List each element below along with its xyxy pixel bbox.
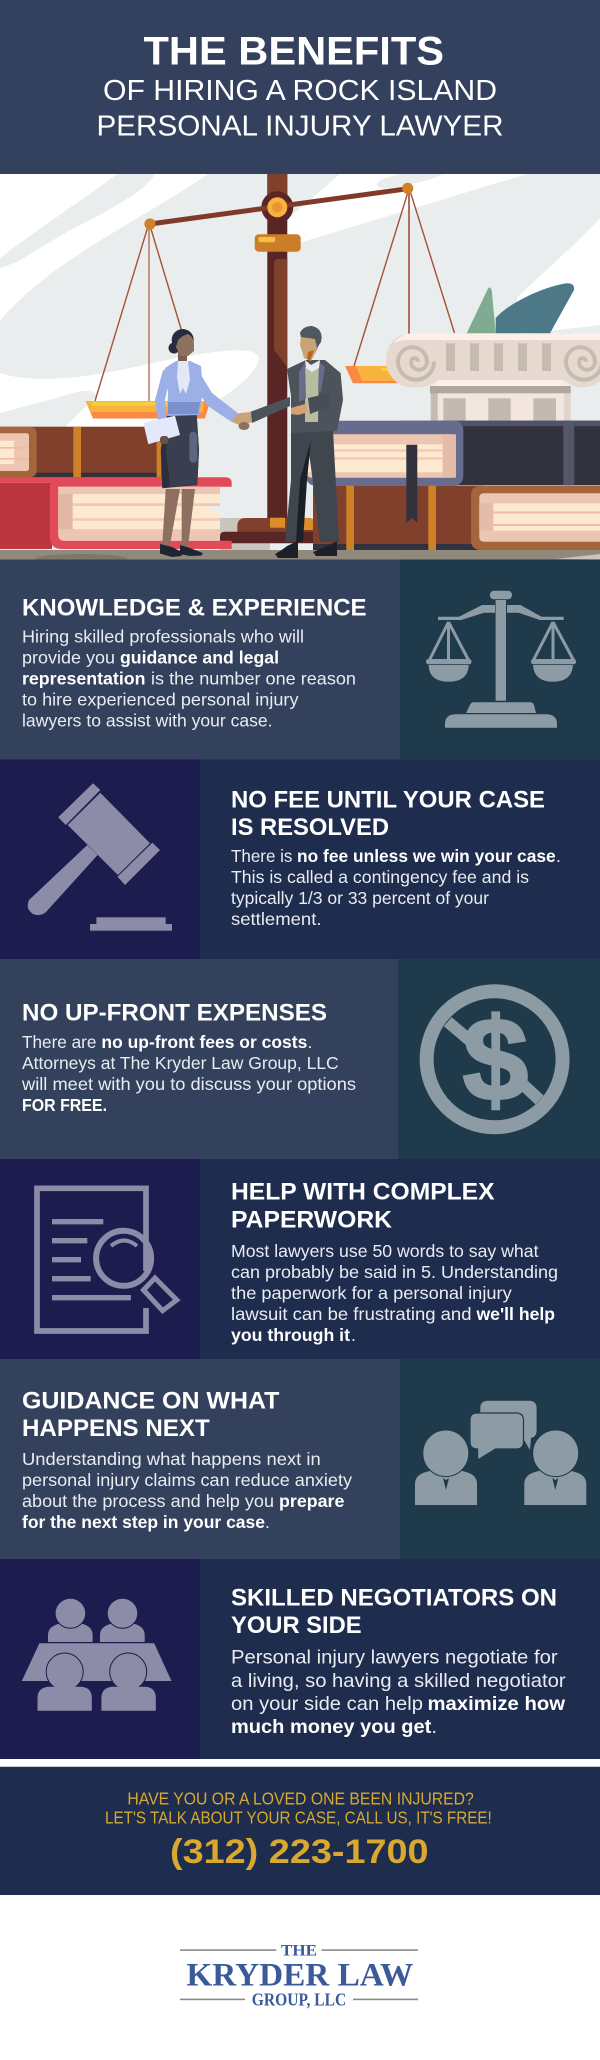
icon: scales of justice — [426, 591, 576, 728]
body text — [231, 1241, 558, 1345]
body text — [22, 1449, 352, 1532]
heading: PAPERWORK — [231, 1206, 392, 1233]
panel: help with complex paperwork — [0, 1159, 600, 1359]
icon: no dollar sign — [427, 991, 563, 1127]
body text: Attorneys at The Kryder Law Group, LLC — [22, 1053, 339, 1073]
body text — [231, 1647, 566, 1738]
body text: FOR FREE. — [22, 1095, 107, 1115]
body text: . — [308, 1032, 312, 1052]
body text: . — [556, 846, 561, 866]
call to action text: LET'S TALK ABOUT YOUR CASE, CALL US, IT'S FREE! — [105, 1807, 492, 1827]
body text: Personal injury lawyers negotiate for — [231, 1647, 558, 1669]
title: OF HIRING A ROCK ISLAND — [103, 75, 497, 107]
scale collar — [255, 234, 301, 252]
body text: lawsuit can be frustrating and — [231, 1304, 472, 1324]
icon: document with magnifier — [37, 1188, 177, 1331]
body text: personal injury claims can reduce anxiety — [22, 1470, 352, 1490]
right scale pan — [345, 366, 400, 383]
panel: skilled negotiators on your side — [0, 1559, 600, 1759]
body text: . — [265, 1512, 270, 1532]
body text: on your side can help — [231, 1693, 423, 1715]
body text: maximize how — [428, 1693, 566, 1715]
heading: NO UP-FRONT EXPENSES — [22, 999, 327, 1026]
body text: much money you get — [231, 1716, 432, 1738]
icon: two people talking — [415, 1401, 586, 1505]
heading: KNOWLEDGE & EXPERIENCE — [22, 595, 367, 622]
header banner — [0, 0, 600, 174]
heading: IS RESOLVED — [231, 814, 389, 841]
figure: man in grey suit — [232, 326, 343, 558]
heading — [22, 1388, 279, 1442]
body text: guidance and legal — [120, 647, 279, 667]
book: brown with orange straps — [313, 486, 483, 550]
body text: prepare — [279, 1491, 345, 1511]
heading: NO FEE UNTIL YOUR CASE — [231, 786, 545, 813]
call to action text — [105, 1788, 492, 1827]
body text: will meet with you to discuss your options — [21, 1074, 356, 1094]
pillar base — [220, 518, 322, 543]
body text: for the next step in your case — [22, 1512, 265, 1532]
title — [96, 30, 504, 143]
body text: is the number one reason — [151, 668, 356, 688]
panel: guidance on what happens next — [0, 1359, 600, 1559]
heading: SKILLED NEGOTIATORS ON — [231, 1585, 557, 1612]
body text: the paperwork for a personal injury — [231, 1283, 512, 1303]
body text: Hiring skilled professionals who will — [22, 626, 304, 646]
logo: The Kryder Law Group, LLC: THE — [281, 1943, 317, 1960]
title: THE BENEFITS — [144, 30, 444, 74]
classical column — [386, 334, 600, 421]
heading: YOUR SIDE — [231, 1612, 362, 1639]
scale beam — [144, 183, 413, 230]
scale pillar — [261, 174, 293, 522]
panel: no fee until your case is resolved — [0, 760, 600, 960]
body text: provide you — [22, 647, 115, 667]
body text: representation — [22, 668, 146, 688]
body text: about the process and help you — [22, 1491, 274, 1511]
icon: people negotiating at a table — [22, 1598, 171, 1711]
hero illustration: scales of justice, handshake, books — [0, 174, 600, 564]
heading: GUIDANCE ON WHAT — [22, 1388, 279, 1415]
heading — [231, 1585, 557, 1639]
heading — [231, 786, 545, 841]
panel: knowledge and experience — [0, 560, 600, 760]
icon: no dollar sign: $ — [463, 994, 528, 1126]
title: PERSONAL INJURY LAWYER — [96, 111, 504, 143]
body text — [231, 846, 561, 929]
book: pages at lower right — [471, 486, 600, 550]
logo: The Kryder Law Group, LLC — [180, 1943, 418, 2010]
body text: There is — [231, 846, 293, 866]
body text: to hire experienced personal injury — [22, 689, 299, 709]
icon: gavel — [28, 783, 172, 931]
body text: a living, so having a skilled negotiator — [231, 1670, 566, 1692]
logo: The Kryder Law Group, LLC: KRYDER LAW — [186, 1958, 413, 1994]
heading — [231, 1178, 495, 1233]
phone number: (312) 223-1700 — [170, 1833, 429, 1871]
body text: typically 1/3 or 33 percent of your — [231, 888, 489, 908]
bookmark ribbon — [406, 445, 417, 523]
body text: Understanding what happens next in — [22, 1449, 321, 1469]
body text: lawyers to assist with your case. — [22, 710, 272, 730]
logo: The Kryder Law Group, LLC: GROUP, LLC — [252, 1990, 346, 2010]
body text: can probably be said in 5. Understanding — [231, 1262, 558, 1282]
figure: woman with tablet — [143, 329, 238, 557]
heading: HAPPENS NEXT — [22, 1415, 210, 1442]
book: dark hardcover — [400, 421, 600, 485]
body text: settlement. — [231, 909, 322, 929]
panel: no up-front expenses — [0, 959, 600, 1159]
body text — [22, 626, 356, 730]
body text: . — [432, 1716, 437, 1738]
body text: we'll help — [475, 1304, 555, 1324]
body text: There are — [22, 1032, 96, 1052]
body text: This is called a contingency fee and is — [231, 867, 529, 887]
book: brown top-left — [0, 427, 162, 477]
body text: no up-front fees or costs — [101, 1032, 308, 1052]
ground — [0, 518, 600, 564]
book: blue open pages — [306, 421, 463, 486]
call to action banner — [0, 1766, 600, 1895]
body text: . — [351, 1325, 356, 1345]
left scale pan — [86, 401, 210, 418]
heading: HELP WITH COMPLEX — [231, 1178, 495, 1205]
scale strings — [95, 193, 454, 402]
call to action text: HAVE YOU OR A LOVED ONE BEEN INJURED? — [127, 1788, 474, 1808]
plants — [467, 283, 574, 333]
body text: Most lawyers use 50 words to say what — [231, 1241, 539, 1261]
body text: you through it — [231, 1325, 350, 1345]
body text: no fee unless we win your case — [297, 846, 556, 866]
body text — [21, 1032, 356, 1115]
book: red — [0, 477, 232, 549]
